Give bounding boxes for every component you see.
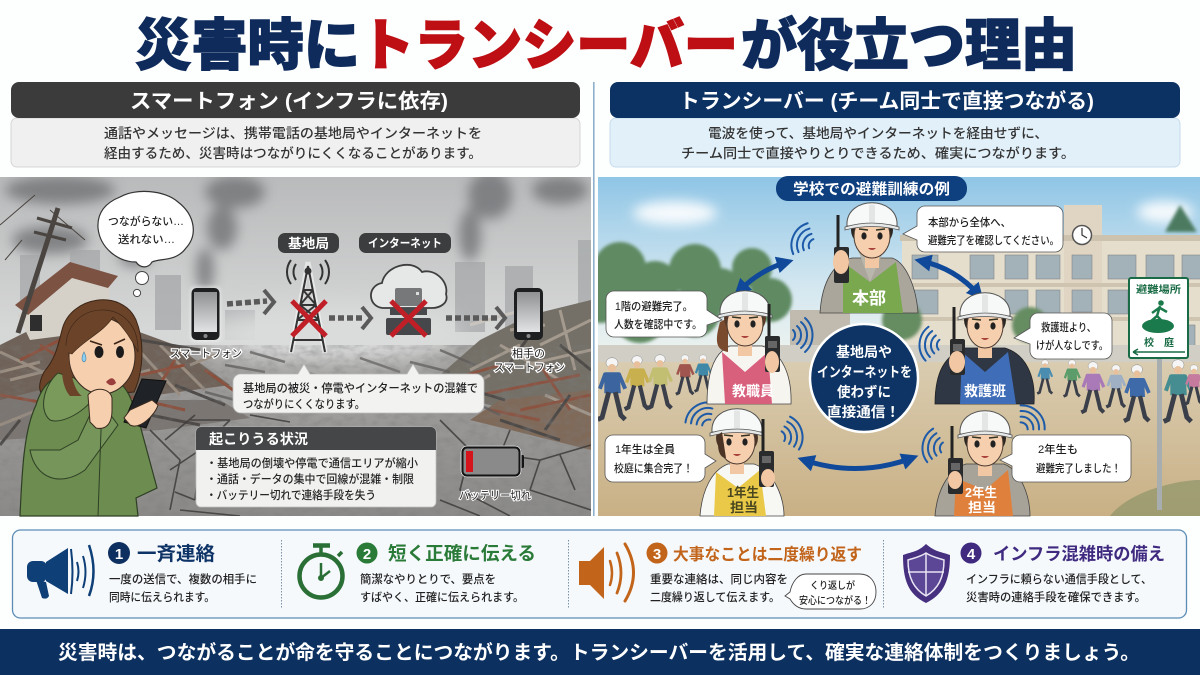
icon: red cross on cloud: [391, 301, 426, 336]
evacuation sign: 校 庭: [1144, 336, 1174, 349]
person: teacher: [707, 291, 791, 404]
panel: four benefits: [12, 530, 1186, 618]
person: headquarters: 本部: [852, 289, 886, 308]
footer message bar: 災害時は、つながることが命を守ることにつながります。トランシーバーを活用して、確実な連絡体制をつくりましょう。: [58, 641, 1140, 664]
number 1: [108, 542, 130, 564]
body 2: [360, 572, 524, 604]
speech: teacher: [606, 291, 722, 337]
thought bubble: 送れない…: [118, 232, 175, 246]
benefit 4: infrastructure backup: [903, 542, 1165, 604]
header: smartphone: スマートフォン (インフラに依存): [130, 90, 448, 113]
number 3: [646, 542, 668, 564]
header: transceiver: [610, 82, 1180, 167]
arrow: tower to cloud: [329, 307, 371, 329]
header: transceiver: トランシーバー (チーム同士で直接つながる): [679, 89, 1094, 113]
panel: possible situations: ・通話・データの集中で回線が混雑・制限: [206, 472, 414, 486]
body 1: 同時に伝えられます。: [109, 590, 215, 604]
ground cracks: [150, 415, 591, 516]
icon: internet cloud with server: [371, 265, 447, 335]
evacuation sign: [1129, 278, 1188, 510]
header: smartphone: [11, 82, 580, 167]
body 2: 簡潔なやりとりで、要点を: [360, 572, 496, 586]
heading 1: 一斉連絡: [137, 543, 215, 565]
header: transceiver: 電波を使って、基地局やインターネットを経由せずに、: [708, 125, 1048, 141]
fence: [598, 345, 1200, 363]
number 4: [960, 542, 982, 564]
school background: [572, 177, 1200, 516]
speech: first-year teacher: 1年生は全員: [615, 442, 675, 456]
speech: first-year teacher: [605, 435, 716, 482]
benefit 3: repeat important info: [579, 542, 876, 609]
speech: teacher: 人数を確認中です。: [614, 317, 702, 331]
speech: headquarters: [903, 206, 1063, 252]
body 4: [966, 572, 1152, 604]
speech: teacher: 1階の避難完了。: [615, 299, 693, 313]
utility pole: [0, 195, 85, 333]
person: first-year teacher: 担当: [730, 500, 758, 515]
person: second-year teacher: 2年生: [965, 485, 997, 500]
body 3: [650, 572, 788, 604]
label: remote smartphone: スマートフォン: [494, 362, 565, 374]
speech: headquarters: 本部から全体へ、: [928, 215, 1011, 229]
center message circle: 基地局や: [836, 344, 892, 360]
ground texture: [0, 345, 591, 480]
footer message bar: [0, 629, 1200, 675]
title: [135, 14, 1077, 77]
woman with smartphone: [20, 300, 166, 516]
person: rescue team: [935, 293, 1034, 404]
heading 3: 大事なことは二度繰り返す: [673, 545, 862, 564]
label: remote smartphone: [494, 346, 565, 374]
panel: possible situations: 起こりうる状況: [209, 431, 308, 447]
speech: second-year teacher: 2年生も: [1038, 442, 1078, 456]
panel: disaster scene: [0, 171, 1200, 675]
header: transceiver: チーム同士で直接やりとりできるため、確実につながります。: [681, 145, 1075, 161]
center message circle: インターネットを: [817, 364, 912, 380]
center message circle: 使わずに: [837, 384, 891, 400]
benefit 1: broadcast: [27, 542, 257, 604]
speech: rescue team: [1014, 313, 1112, 359]
title: トランシーバー: [360, 14, 738, 77]
speech: reassurance: [785, 574, 876, 609]
callout: cause of failure: 基地局の被災・停電やインターネットの混雑で: [243, 381, 478, 395]
radio waves: [681, 220, 1050, 464]
number 2: [356, 542, 378, 564]
person: headquarters: [820, 203, 918, 313]
body 2: すばやく、正確に伝えられます。: [360, 590, 524, 604]
callout: cause of failure: [233, 364, 484, 413]
icon: broken tower: [287, 260, 329, 353]
icon: shield: [903, 544, 950, 603]
center message circle: 直接通信！: [827, 404, 900, 420]
header: smartphone: 経由するため、災害時はつながりにくくなることがあります。: [104, 145, 482, 161]
body 1: [109, 572, 257, 604]
panel: school drill scene: [572, 176, 1200, 516]
arrows between radios: [739, 261, 979, 469]
label: low battery: バッテリー切れ: [459, 489, 531, 502]
school building: [900, 205, 1200, 355]
heading 4: インフラ混雑時の備え: [993, 544, 1165, 564]
label: school drill example: 学校での避難訓練の例: [793, 180, 950, 198]
person: first-year teacher: [700, 409, 784, 516]
speech: rescue team: けが人なしです。: [1036, 338, 1108, 352]
speech: first-year teacher: 校庭に集合完了！: [614, 461, 693, 475]
body 4: インフラに頼らない通信手段として、: [966, 572, 1152, 586]
number 2: 2: [363, 546, 371, 563]
person: second-year teacher: [935, 411, 1030, 516]
body 1: 一度の送信で、複数の相手に: [109, 572, 257, 586]
callout: cause of failure: つながりにくくなります。: [243, 397, 365, 411]
label: internet: [359, 233, 451, 253]
person: teacher: 教職員: [732, 383, 774, 399]
center message circle: [810, 324, 918, 432]
number 1: 1: [115, 546, 123, 563]
body 3: 二度繰り返して伝えます。: [650, 590, 780, 604]
icon: smartphone left: [190, 286, 221, 342]
speech: second-year teacher: [1000, 435, 1131, 482]
number 3: 3: [653, 546, 661, 563]
panel: possible situations: ・基地局の倒壊や停電で通信エリアが縮小: [206, 456, 418, 470]
icon: stopwatch: [300, 546, 342, 598]
rubble left: [0, 262, 250, 445]
person: second-year teacher: 担当: [968, 500, 996, 515]
label: school drill example: [776, 176, 967, 201]
speech: headquarters: 避難完了を確認してください。: [928, 233, 1059, 247]
icon: red cross on tower: [292, 301, 326, 336]
person: rescue team: 救護班: [964, 383, 1006, 399]
label: base station: 基地局: [288, 236, 329, 251]
debris band: [205, 350, 500, 415]
ground: [598, 362, 1200, 516]
label: internet: インターネット: [368, 237, 442, 250]
walking students: [598, 355, 1200, 422]
evacuation sign: 避難場所: [1136, 283, 1181, 296]
title: 災害時に: [135, 14, 360, 77]
icon: remote smartphone: [514, 288, 543, 340]
disaster background: [0, 171, 592, 516]
arrow: smartphone to tower: [227, 290, 274, 314]
rubble right: [440, 300, 591, 450]
icon: megaphone: [27, 545, 94, 599]
thought bubble: つながらない…: [108, 214, 184, 228]
trees: [572, 205, 1197, 343]
body 3: 重要な連絡は、同じ内容を: [650, 572, 788, 586]
body 4: 災害時の連絡手段を確保できます。: [966, 590, 1146, 604]
person: first-year teacher: 1年生: [727, 485, 759, 500]
icon: low battery: [461, 446, 524, 477]
thought bubble: [98, 191, 193, 297]
number 4: 4: [967, 546, 976, 563]
arrow: cloud to remote phone: [446, 307, 505, 329]
heading 2: 短く正確に伝える: [388, 543, 536, 564]
panel: possible situations: ・バッテリー切れで連絡手段を失う: [206, 488, 376, 502]
speech: reassurance: 安心につながる！: [799, 594, 871, 607]
speech: reassurance: くり返しが: [810, 579, 855, 592]
label: base station: [278, 233, 339, 253]
icon: speaker: [579, 544, 634, 601]
speech: second-year teacher: 避難完了しました！: [1036, 461, 1121, 475]
title: が役立つ理由: [741, 14, 1077, 77]
header: smartphone: 通話やメッセージは、携帯電話の基地局やインターネットを: [104, 125, 482, 141]
label: remote smartphone: 相手の: [512, 346, 545, 360]
speech: rescue team: 救護班より、: [1041, 320, 1096, 334]
panel: possible situations: [196, 427, 436, 507]
panel divider: [593, 82, 595, 516]
label: smartphone: スマートフォン: [170, 348, 242, 360]
benefit 2: short and precise: [300, 542, 536, 604]
